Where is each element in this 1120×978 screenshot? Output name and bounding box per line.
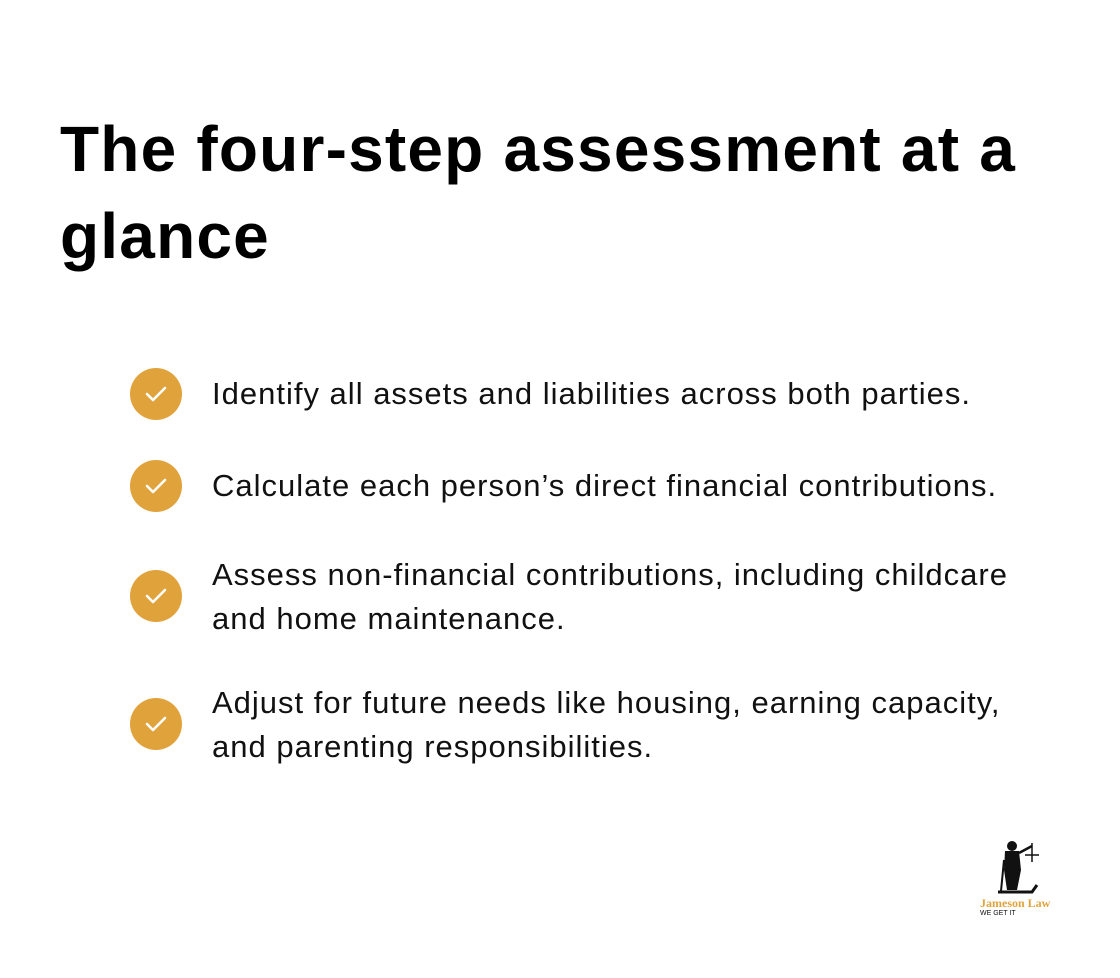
logo: WE GET IT bbox=[980, 910, 1016, 917]
item 3 bbox=[130, 557, 1008, 636]
icon: check bbox=[130, 570, 182, 622]
icon: check bbox=[130, 460, 182, 512]
brand text: Jameson Law bbox=[980, 896, 1050, 910]
logo bbox=[980, 841, 1050, 917]
icon: check bbox=[130, 698, 182, 750]
item 1 bbox=[130, 368, 971, 420]
item 4 bbox=[130, 685, 1001, 764]
text: and parenting responsibilities. bbox=[212, 729, 653, 764]
text: Identify all assets and liabilities across both parties. bbox=[212, 376, 971, 411]
text: Assess non-financial contributions, including childcare bbox=[212, 557, 1008, 592]
icon: justice figure bbox=[998, 841, 1039, 894]
text: and home maintenance. bbox=[212, 601, 566, 636]
text bbox=[212, 557, 1008, 636]
text: Adjust for future needs like housing, earning capacity, bbox=[212, 685, 1001, 720]
text: Calculate each person’s direct financial contributions. bbox=[212, 468, 997, 503]
icon: check bbox=[130, 368, 182, 420]
text bbox=[212, 685, 1001, 764]
title: The four-step assessment at a glance bbox=[60, 113, 1016, 272]
item 2 bbox=[130, 460, 997, 512]
